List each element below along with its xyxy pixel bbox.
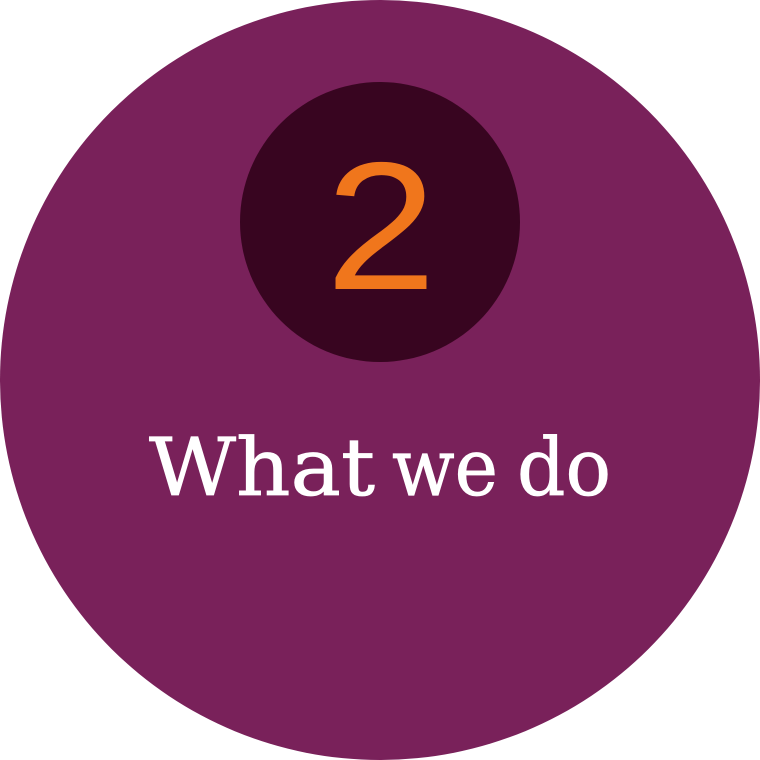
heading: What we do: What [149, 421, 375, 514]
number: 2: 2 [326, 124, 436, 328]
heading: What we do: we [392, 421, 498, 514]
heading: What we do: do [517, 421, 611, 514]
panel: inner dark number circle [240, 82, 520, 362]
heading: What we do [149, 421, 611, 514]
